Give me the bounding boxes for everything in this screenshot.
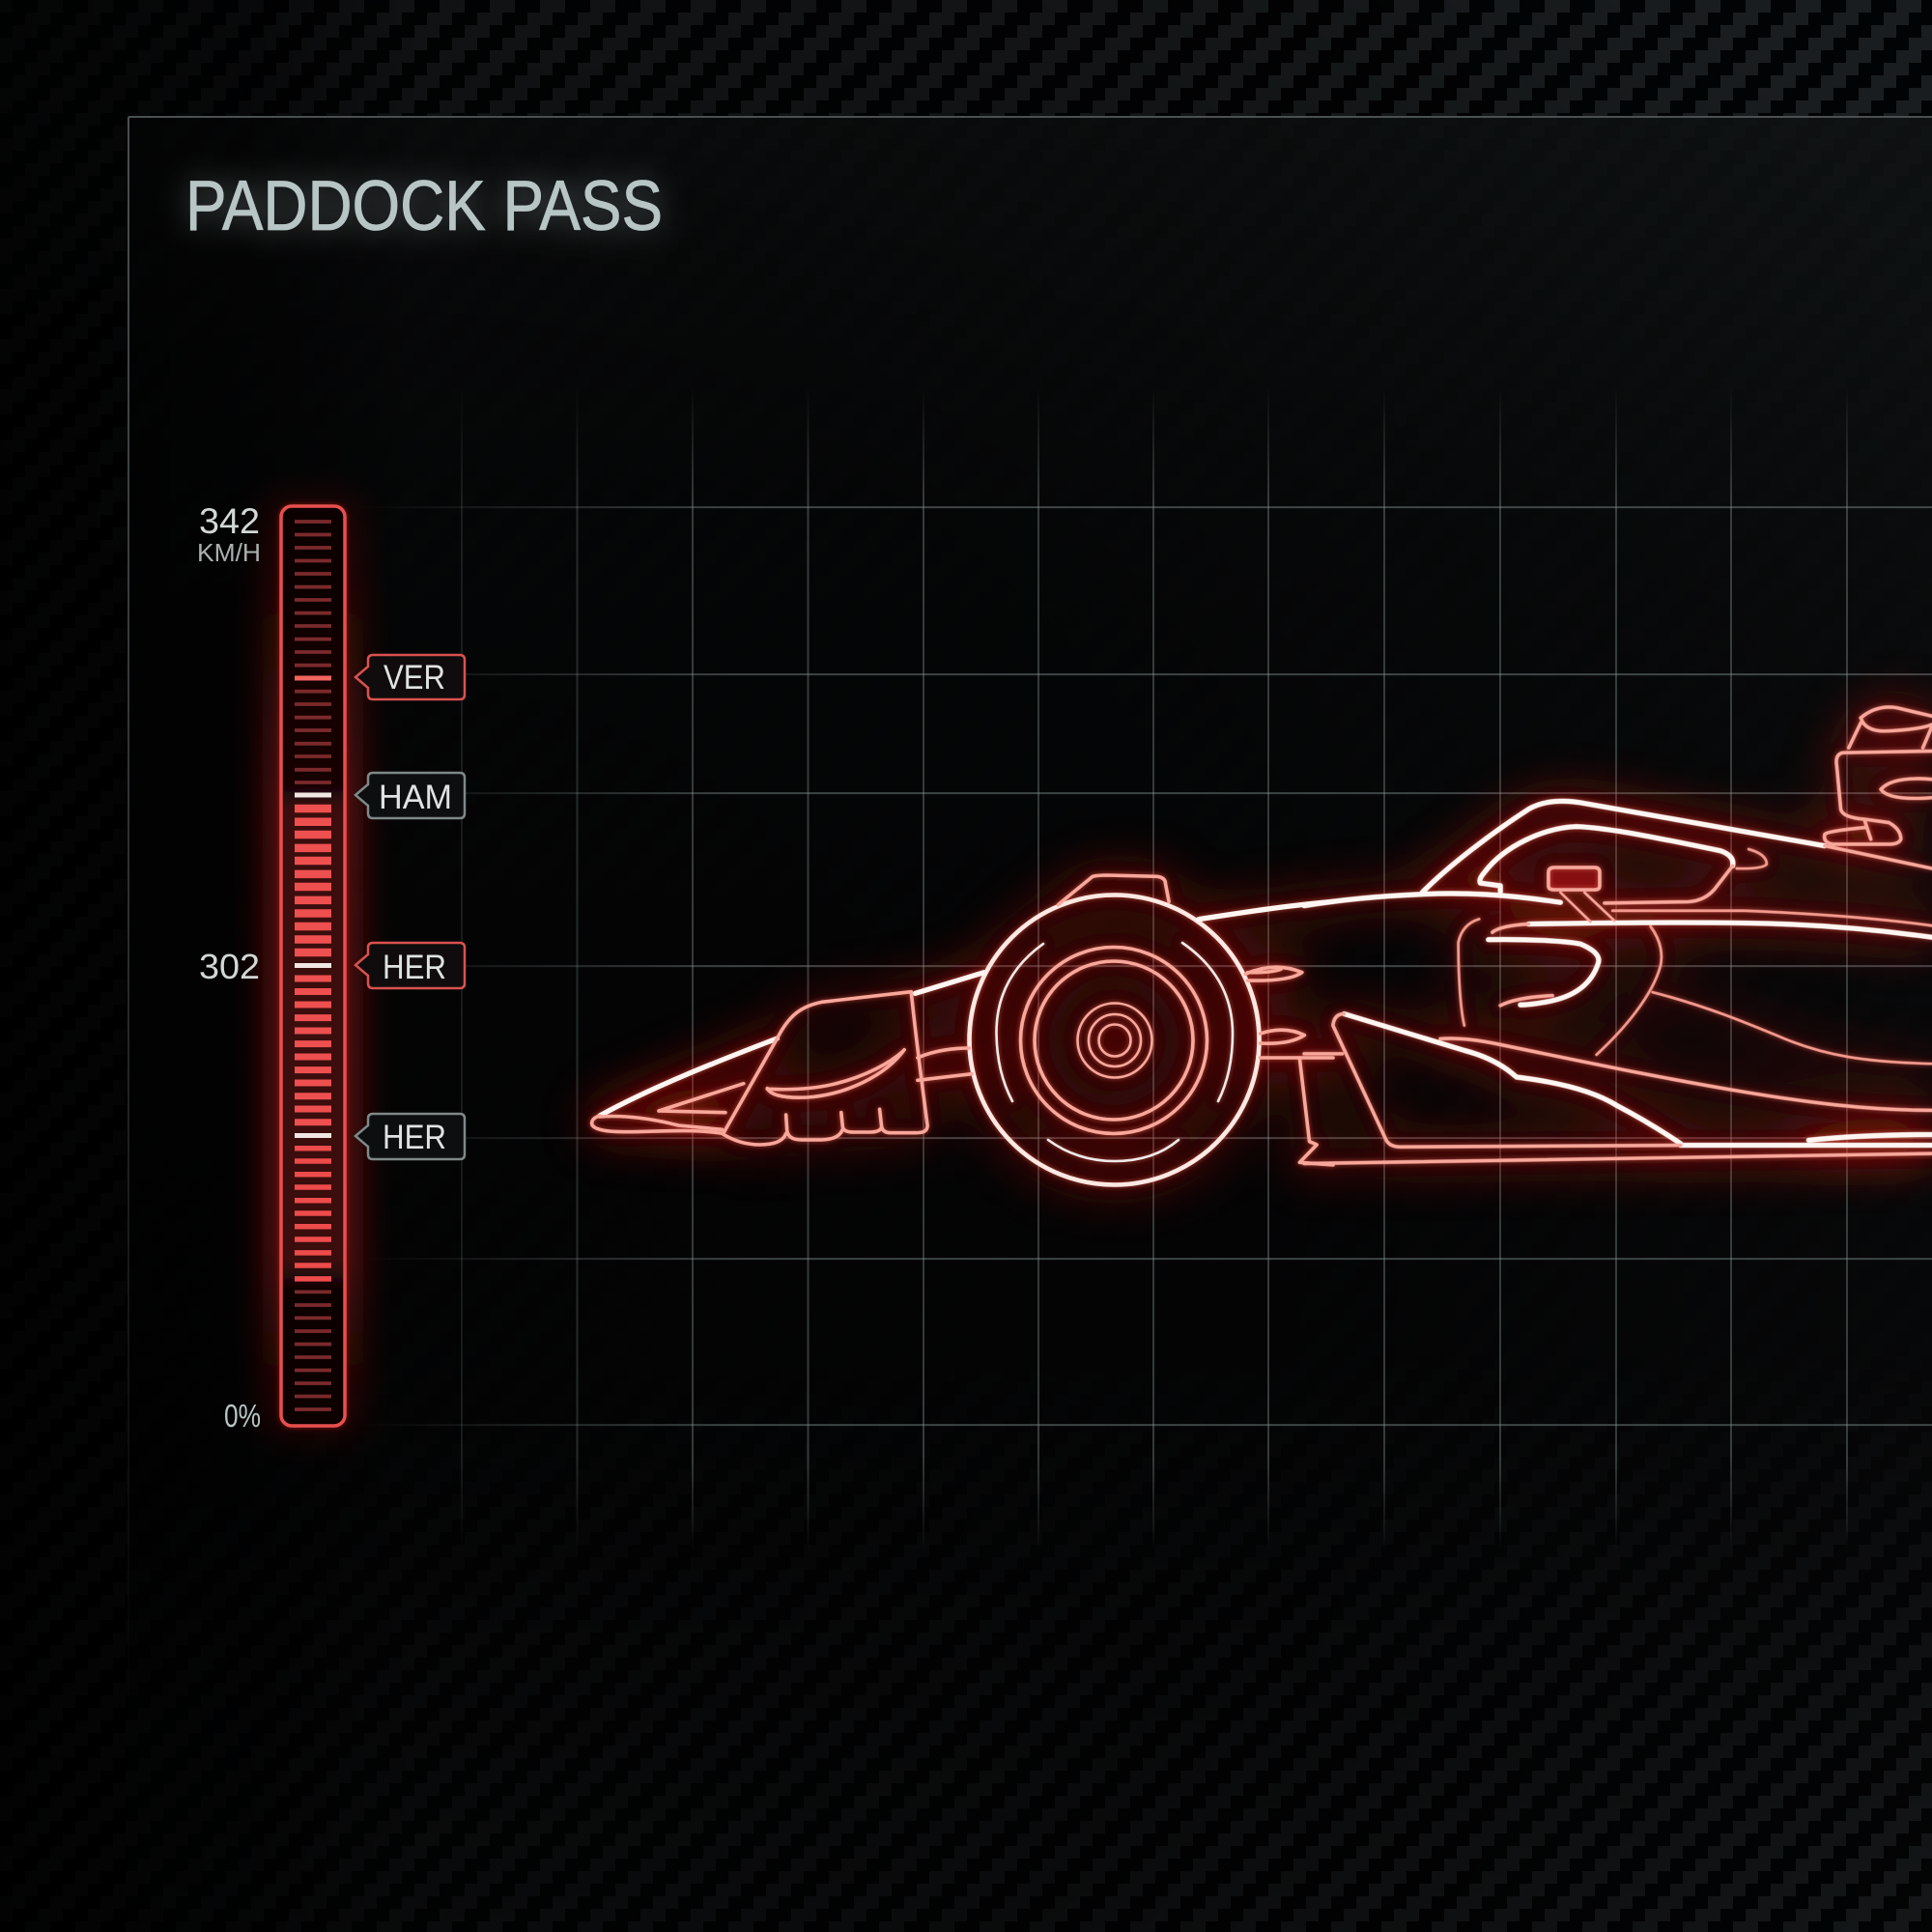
lit ticks lower bbox=[295, 1149, 331, 1279]
driver tag HER lower: HER bbox=[383, 1119, 446, 1156]
panel frame bbox=[128, 117, 1932, 1719]
telemetry grid bbox=[357, 386, 1932, 1550]
scale unit km/h: KM/H bbox=[197, 538, 261, 567]
nose and front wing bbox=[592, 875, 1333, 1165]
gauge halo bbox=[263, 493, 363, 1439]
front wheel bbox=[970, 895, 1260, 1184]
lit ticks upper bbox=[295, 809, 331, 952]
driver tag HAM bbox=[355, 773, 465, 818]
title glow: PADDOCK PASS bbox=[185, 167, 663, 245]
scale label 0%: 0% bbox=[224, 1398, 261, 1434]
driver tag HER upper: HER bbox=[383, 949, 446, 986]
speed gauge bbox=[263, 493, 363, 1439]
white marker ticks bbox=[295, 795, 331, 1136]
scale label 302: 302 bbox=[199, 947, 260, 986]
driver tag VER bbox=[355, 655, 465, 699]
driver tag HAM: HAM bbox=[379, 779, 452, 816]
chassis, halo and sidepod bbox=[1304, 707, 1932, 1163]
driver tag VER: VER bbox=[384, 659, 445, 696]
left edge shade bbox=[0, 0, 425, 1932]
title: PADDOCK PASS bbox=[185, 167, 663, 245]
driver tag HER lower bbox=[355, 1114, 465, 1159]
race car neon outline bbox=[592, 707, 1932, 1184]
gauge body bbox=[281, 506, 345, 1426]
mirror fill bbox=[1548, 867, 1600, 890]
lit ticks middle bbox=[295, 979, 331, 1122]
dim ticks bbox=[295, 522, 331, 1409]
ver marker tick bbox=[295, 676, 331, 680]
driver tag HER upper bbox=[355, 943, 465, 988]
scale label 342: 342 bbox=[199, 501, 260, 541]
